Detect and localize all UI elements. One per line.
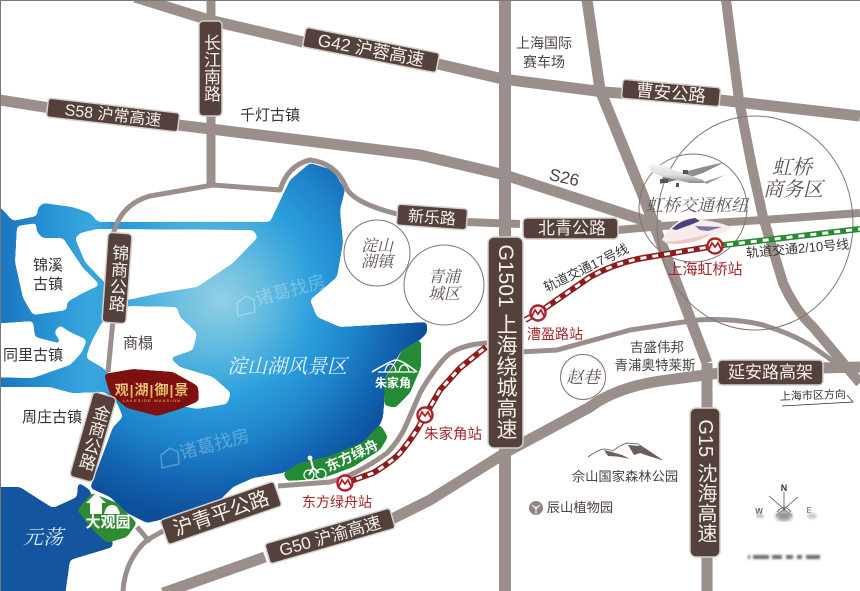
project marker: Guanhu Yujing: LAKESIDE MANSION: [123, 398, 181, 403]
road label: Jinshang Road south: [69, 391, 117, 483]
station icons: [338, 238, 722, 490]
water: Yuandang lake: [0, 482, 113, 591]
road: G1501: [499, 0, 511, 591]
place: Zhouzhuang: 周庄古镇: [22, 408, 82, 426]
road label: Yan'an elevated: 延安路高架: [728, 363, 813, 382]
icon: bridge at Zhujiajiao: [372, 360, 417, 372]
compass: E: [806, 506, 812, 515]
road: southwest branch: [123, 527, 165, 591]
icon: airplane: [648, 162, 725, 187]
station name: Zhujiajiao: 朱家角站: [424, 426, 482, 443]
place: Shanghai circuit line 2: 赛车场: [523, 54, 565, 70]
road: thin link east of G1501: [520, 320, 840, 366]
road: Jinshang road: [108, 320, 113, 372]
circle: Qingpu district: [404, 245, 484, 325]
lake name: 淀山湖风景区: [227, 356, 350, 378]
place: Dianshan town: 淀山: [361, 237, 395, 255]
road label: Caoan: 曹安公路: [635, 80, 707, 106]
road: east north-south curve: [726, 0, 860, 383]
station: Hongqiao: [708, 238, 722, 254]
road: Yan'an elevated: [390, 367, 860, 520]
place: Shangta: 商榻: [123, 335, 153, 352]
place: Tongli: 同里古镇: [3, 347, 63, 364]
road label: Jinshang Road south: 金商公路: [74, 402, 112, 472]
road: G42: [135, 0, 860, 116]
place: Qingpu: 青浦: [428, 268, 463, 286]
place: Qingpu line 2: 城区: [428, 285, 462, 303]
road label: G42: G42 沪蓉高速: [316, 30, 426, 70]
circle: Dianshan Lake town: [344, 220, 410, 286]
lake name: Yuandang: 元荡: [23, 527, 66, 549]
watermark on upper lake: 诸葛找房: [253, 271, 328, 309]
circles: districts: [344, 116, 853, 400]
land: Shangta: [86, 306, 231, 409]
station: Dongfang Lvzhou: [338, 476, 352, 490]
place: Qiandeng: 千灯古镇: [240, 107, 300, 124]
road label: G1501: [488, 237, 523, 448]
road label: Changjiang South Road: 长江南路: [201, 34, 220, 102]
land: Tongli town: [0, 321, 87, 378]
road label: G15: G15 沈海高速: [694, 419, 717, 543]
compass: W: [755, 507, 763, 516]
icon: mountains: [588, 443, 662, 460]
road label: Beiqing: 北青公路: [538, 219, 606, 238]
rail line 2/10: [715, 229, 860, 246]
place: Hongqiao business: 虹桥: [772, 157, 814, 179]
road: Xinle and Beiqing east-west: [466, 213, 860, 230]
road label: Huqingping: [160, 481, 282, 545]
road label: G50: [265, 508, 395, 564]
icon: tree: [529, 501, 543, 515]
road label: S58: S58 沪常高速: [64, 101, 162, 130]
place: Sheshan: 佘山国家森林公园: [572, 468, 678, 484]
place: Outlets: 吉盛伟邦: [630, 340, 684, 355]
icon: cyclist: [304, 456, 326, 480]
place: Daguanyuan: 大观园: [85, 513, 131, 531]
land: north island: [75, 229, 258, 300]
station: Zhujiajiao: [418, 408, 432, 422]
road label: Caoan: [621, 79, 721, 107]
project marker: Guanhu Yujing: [104, 369, 199, 416]
station name: Caoying Road: 漕盈路站: [527, 326, 583, 342]
road label: G15: [690, 408, 720, 557]
water: western tinted channels: [0, 200, 112, 394]
label: S26: S26: [547, 165, 581, 190]
icon: pavilion at Daguanyuan: [86, 493, 120, 514]
place: Hongqiao hub: 虹桥交通枢纽: [646, 196, 750, 215]
road label: Beiqing: [523, 218, 618, 239]
circle: Hongqiao business district: [657, 116, 853, 330]
road: G50 lower: [163, 557, 265, 591]
station name: Dongfang Lvzhou: 东方绿舟站: [302, 494, 372, 510]
green area: Dongfang Lvzhou: [283, 424, 388, 481]
road label: G1501: G1501 上海绕城高速: [494, 245, 518, 440]
place: Zhaoxiang: 赵巷: [566, 368, 602, 387]
place: Shanghai circuit: 上海国际: [516, 35, 572, 51]
compass: N: [781, 483, 787, 493]
road label: Xinle: 新乐路: [407, 207, 457, 229]
blurred credit text: [748, 555, 820, 559]
rail line 17: [345, 229, 860, 483]
place: Chenshan: 辰山植物园: [547, 500, 613, 515]
direction label: 上海市区方向: [780, 387, 846, 403]
road: Huqingping thin: [278, 343, 487, 486]
place: Zhujiajiao: 朱家角: [375, 375, 411, 390]
road label: G50: G50 沪渝高速: [277, 513, 383, 560]
road label: Changjiang South Road: [199, 21, 222, 116]
station name: Hongqiao: 上海虹桥站: [667, 261, 743, 278]
station: Caoying Road: [530, 306, 546, 320]
road label: Xinle: [396, 204, 468, 230]
place: Jinxi: 锦溪: [33, 257, 63, 274]
green area: Daguanyuan: [77, 493, 137, 543]
line label 2/10: 轨道交通2/10号线: [745, 237, 850, 260]
road label: Yan'an elevated: [718, 360, 823, 385]
circle: Zhaoxiang: [560, 354, 606, 400]
watermark on upper lake: [237, 271, 328, 316]
circle: Hongqiao hub: [639, 154, 747, 262]
place: Dianshan town line 2: 湖镇: [361, 253, 395, 271]
road: lakeside north curve: [112, 160, 397, 240]
road label: Jinshang Road north: 锦商公路: [105, 243, 129, 313]
land: Jinxi town: [15, 223, 100, 315]
compass: [755, 483, 817, 521]
icon: high-speed train: [662, 218, 733, 244]
place: Dongfang Lvzhou: 东方绿舟: [323, 436, 381, 475]
line label 17: 轨道交通17号线: [541, 241, 631, 295]
watermark on lower lake: 诸葛找房: [177, 425, 252, 463]
place: Jinxi line 2: 古镇: [33, 276, 63, 293]
road label: Huqingping: 沪青平公路: [170, 486, 272, 541]
arrow: direction to downtown: [782, 395, 853, 406]
water: Dianshan Lake and western channels: [0, 163, 427, 591]
road: north-south connecting to G15: [587, 0, 707, 363]
road: S58 and S26: [0, 100, 660, 226]
place: Outlets line 2: 青浦奥特莱斯: [614, 357, 696, 373]
place: Hongqiao business line 2: 商务区: [763, 179, 826, 201]
green area: Zhujiajiao: [384, 339, 421, 408]
road label: Jinshang Road north: [102, 232, 132, 324]
road: Changjiang South: [206, 0, 216, 187]
road label: S58: [46, 98, 180, 132]
project marker: Guanhu Yujing: 观|湖|御|景: [115, 382, 189, 398]
